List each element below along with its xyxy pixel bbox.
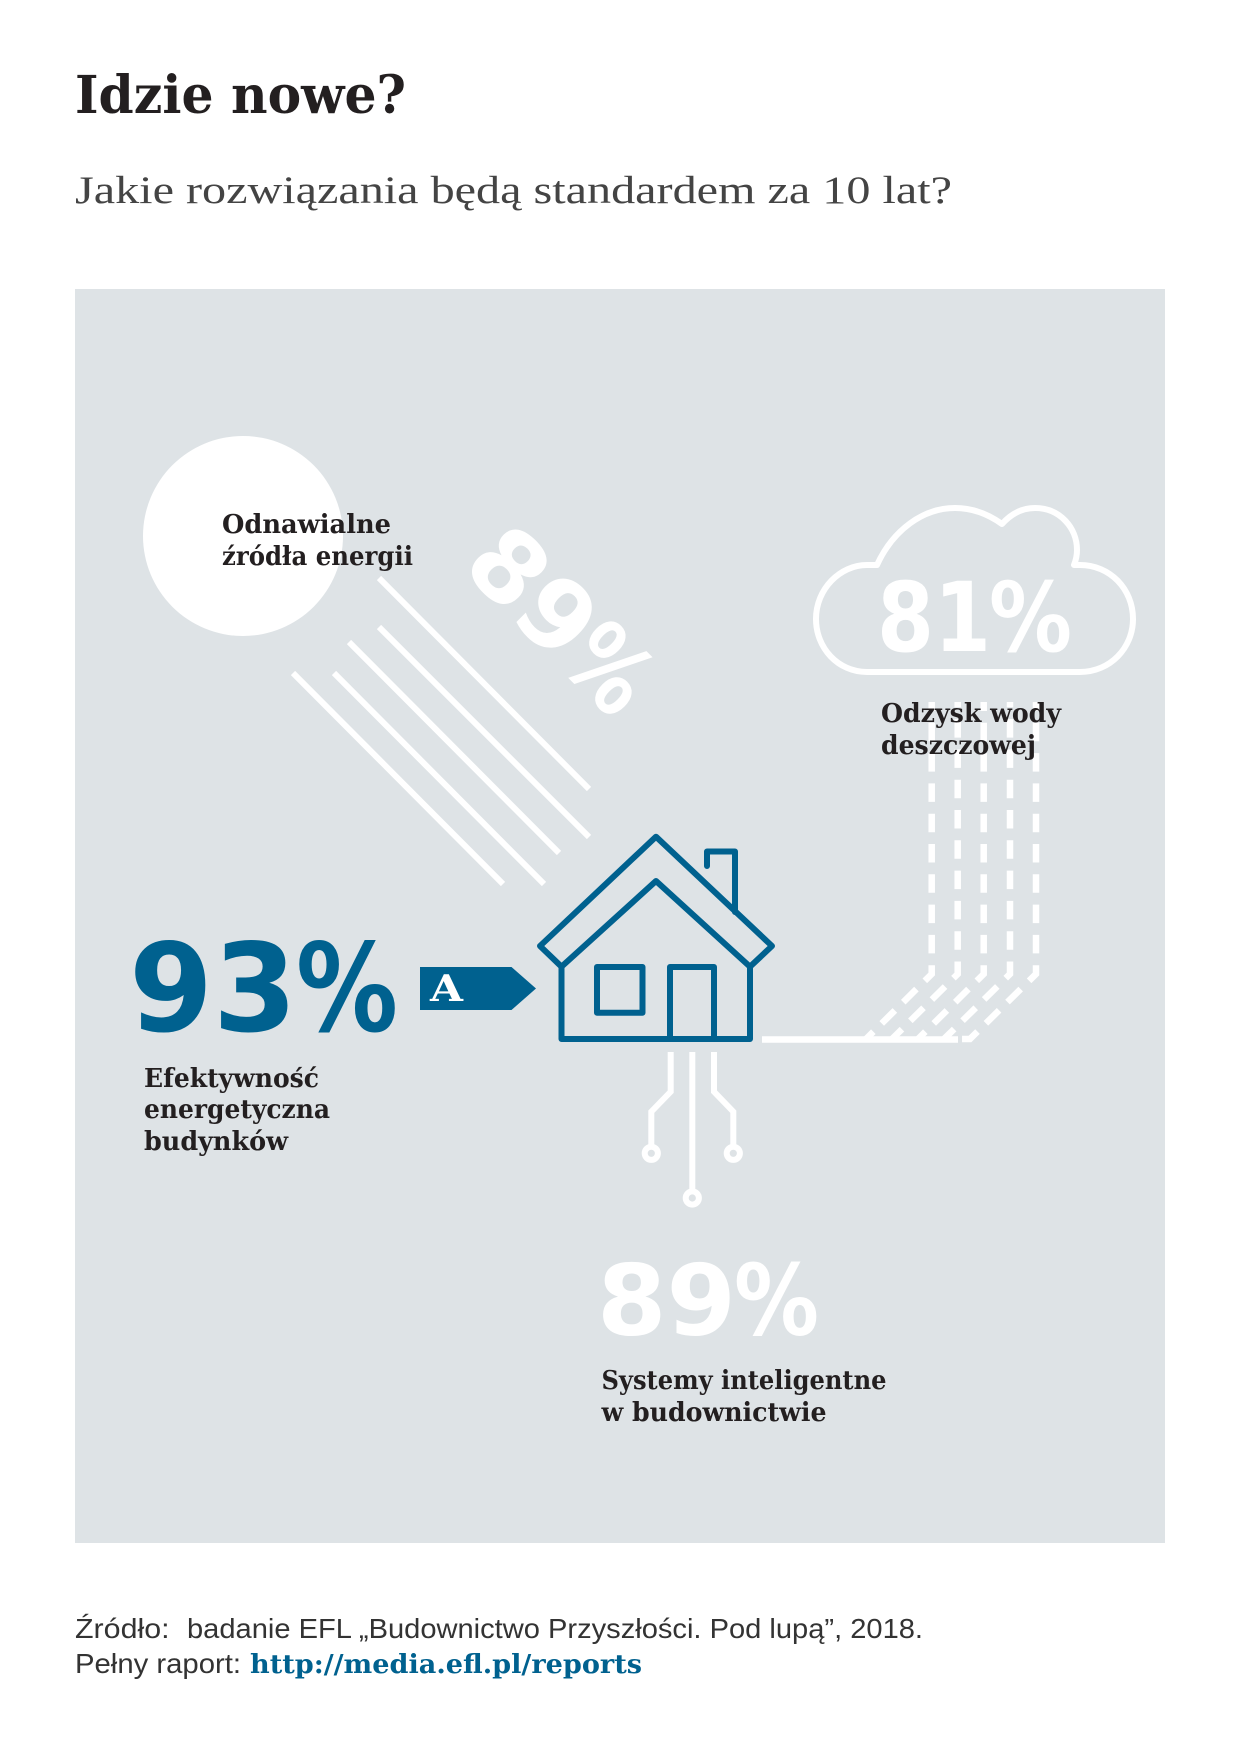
stat: 93%: % bbox=[296, 918, 398, 1060]
title: Idzie nowe? bbox=[75, 65, 406, 126]
icon: rain drain bbox=[866, 702, 1036, 1039]
label: smart systems: w budownictwie bbox=[601, 1398, 826, 1428]
label: renewable energy: źródła energii bbox=[222, 542, 413, 572]
label: renewable energy: Odnawialne bbox=[222, 510, 391, 540]
source note: Źródło: bbox=[75, 1613, 178, 1644]
label: efficiency: Efektywność bbox=[144, 1064, 319, 1094]
group: smart systems bbox=[597, 1052, 896, 1428]
stat: 81%: 81 bbox=[877, 562, 991, 674]
icon: sun rays bbox=[293, 578, 589, 884]
icon: sun bbox=[143, 436, 343, 636]
energy class tag bbox=[420, 967, 536, 1010]
tag shape bbox=[420, 967, 536, 1010]
stat: 89% renewable: 89 bbox=[443, 504, 621, 682]
source note: badanie EFL „Budownictwo Przyszłości. Pod lupą”, 2018. bbox=[187, 1613, 923, 1644]
tag letter: A bbox=[429, 968, 464, 1010]
stat: 89% smart: 89 bbox=[597, 1245, 736, 1359]
group: renewable energy bbox=[143, 436, 677, 884]
stat: 81%: % bbox=[989, 562, 1072, 674]
icon: house bbox=[540, 837, 772, 1039]
label: efficiency: energetyczna bbox=[144, 1095, 330, 1125]
subtitle: Jakie rozwiązania będą standardem za 10 lat? bbox=[75, 169, 952, 212]
label: smart systems: Systemy inteligentne bbox=[602, 1366, 886, 1396]
panel background bbox=[75, 289, 1165, 1543]
group: rainwater recovery bbox=[762, 508, 1133, 1040]
source note: Pełny raport: bbox=[75, 1648, 241, 1679]
stat: 89% renewable: % bbox=[540, 601, 677, 738]
label: rainwater: deszczowej bbox=[881, 731, 1036, 761]
pipe to house bbox=[762, 1036, 958, 1043]
group: energy efficiency bbox=[129, 918, 536, 1157]
label: rainwater: Odzysk wody bbox=[881, 699, 1062, 729]
source note: http://media.efl.pl/reports bbox=[250, 1650, 642, 1680]
stat: 89% smart: % bbox=[734, 1245, 819, 1359]
label: efficiency: budynków bbox=[144, 1127, 289, 1157]
stat: 93%: 93 bbox=[129, 918, 297, 1060]
icon: cloud bbox=[816, 508, 1133, 672]
icon: circuit bbox=[645, 1052, 740, 1205]
panel: survey results bbox=[75, 289, 1165, 1543]
